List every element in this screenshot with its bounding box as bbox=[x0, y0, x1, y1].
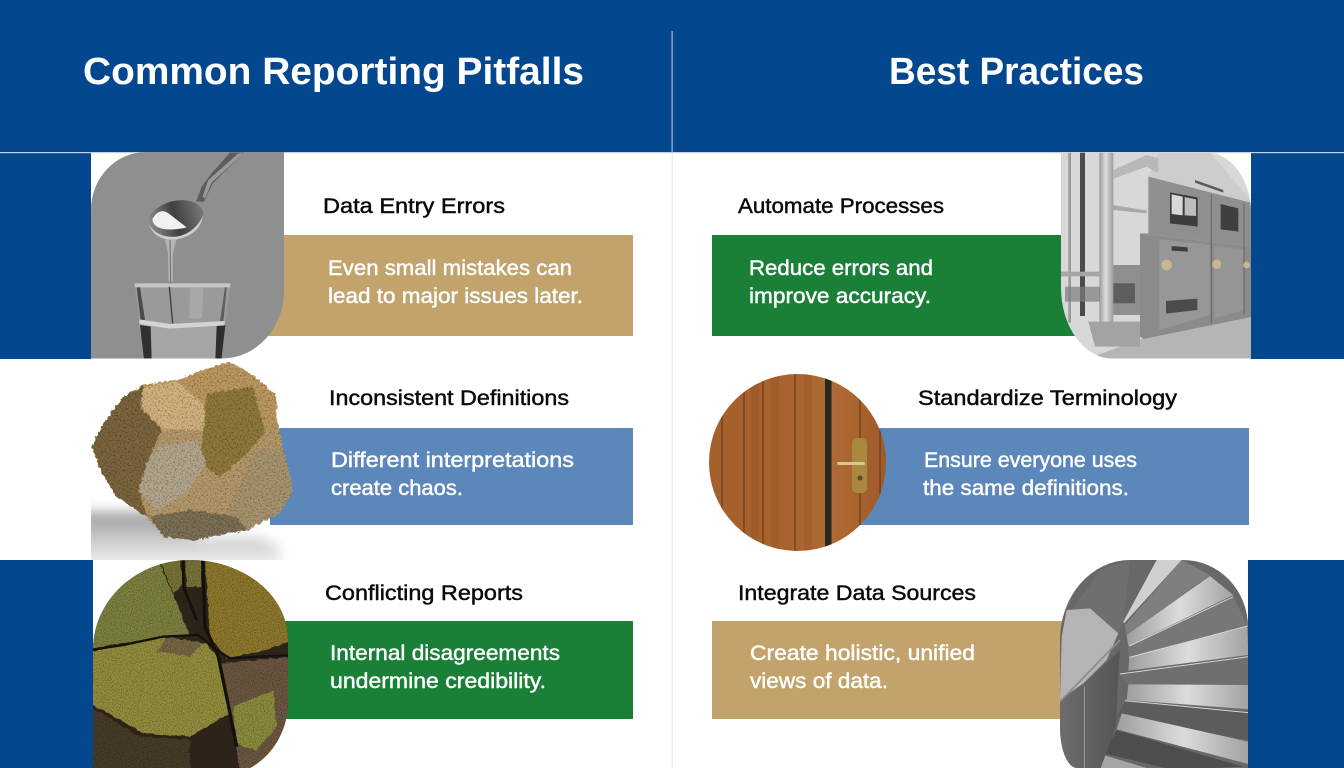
photo: metal spiral staircase bbox=[1057, 557, 1257, 768]
bar: gold bbox=[250, 235, 633, 336]
panel: standardize terminology bbox=[709, 370, 1249, 555]
bar: gold bbox=[712, 621, 1072, 719]
description: Different interpretations bbox=[331, 449, 574, 472]
title: pitfalls: Common Reporting Pitfalls bbox=[83, 51, 584, 93]
panel: inconsistent definitions bbox=[80, 362, 633, 575]
panel: data entry errors bbox=[91, 152, 633, 360]
bar: green bbox=[712, 235, 1092, 336]
heading: Inconsistent Definitions bbox=[329, 387, 569, 410]
description: Create holistic, unified bbox=[750, 642, 975, 665]
description: Reduce errors and bbox=[749, 257, 933, 280]
description bbox=[331, 449, 574, 500]
panel: integrate data sources bbox=[712, 557, 1257, 768]
photo: mossy stones bbox=[90, 560, 293, 768]
heading: Integrate Data Sources bbox=[738, 582, 976, 605]
panel: automate processes bbox=[712, 152, 1253, 360]
photo: rock bbox=[91, 362, 294, 560]
bar: green bbox=[270, 621, 633, 719]
description: Ensure everyone uses bbox=[924, 449, 1137, 472]
description bbox=[328, 257, 583, 308]
description bbox=[749, 257, 933, 308]
description: lead to major issues later. bbox=[328, 285, 583, 308]
photo: spoon pouring water into glass bbox=[91, 152, 284, 360]
description: views of data. bbox=[750, 670, 888, 693]
heading: Conflicting Reports bbox=[325, 582, 523, 605]
description: Internal disagreements bbox=[330, 642, 560, 665]
photo: industrial machine bbox=[1061, 152, 1253, 360]
description: undermine credibility. bbox=[330, 670, 546, 693]
description: improve accuracy. bbox=[749, 285, 931, 308]
description: Even small mistakes can bbox=[328, 257, 572, 280]
bar: blue bbox=[270, 428, 633, 525]
heading: Automate Processes bbox=[738, 195, 944, 218]
photo: wooden door with handle bbox=[709, 370, 886, 555]
description: create chaos. bbox=[331, 477, 463, 500]
panel: conflicting reports bbox=[90, 560, 633, 768]
heading: Data Entry Errors bbox=[323, 195, 505, 218]
heading: Standardize Terminology bbox=[918, 387, 1178, 410]
description bbox=[330, 642, 560, 693]
description bbox=[923, 449, 1137, 500]
bar: blue bbox=[860, 428, 1249, 525]
description: the same definitions. bbox=[923, 477, 1129, 500]
title: best practices: Best Practices bbox=[889, 51, 1144, 93]
description bbox=[750, 642, 975, 693]
